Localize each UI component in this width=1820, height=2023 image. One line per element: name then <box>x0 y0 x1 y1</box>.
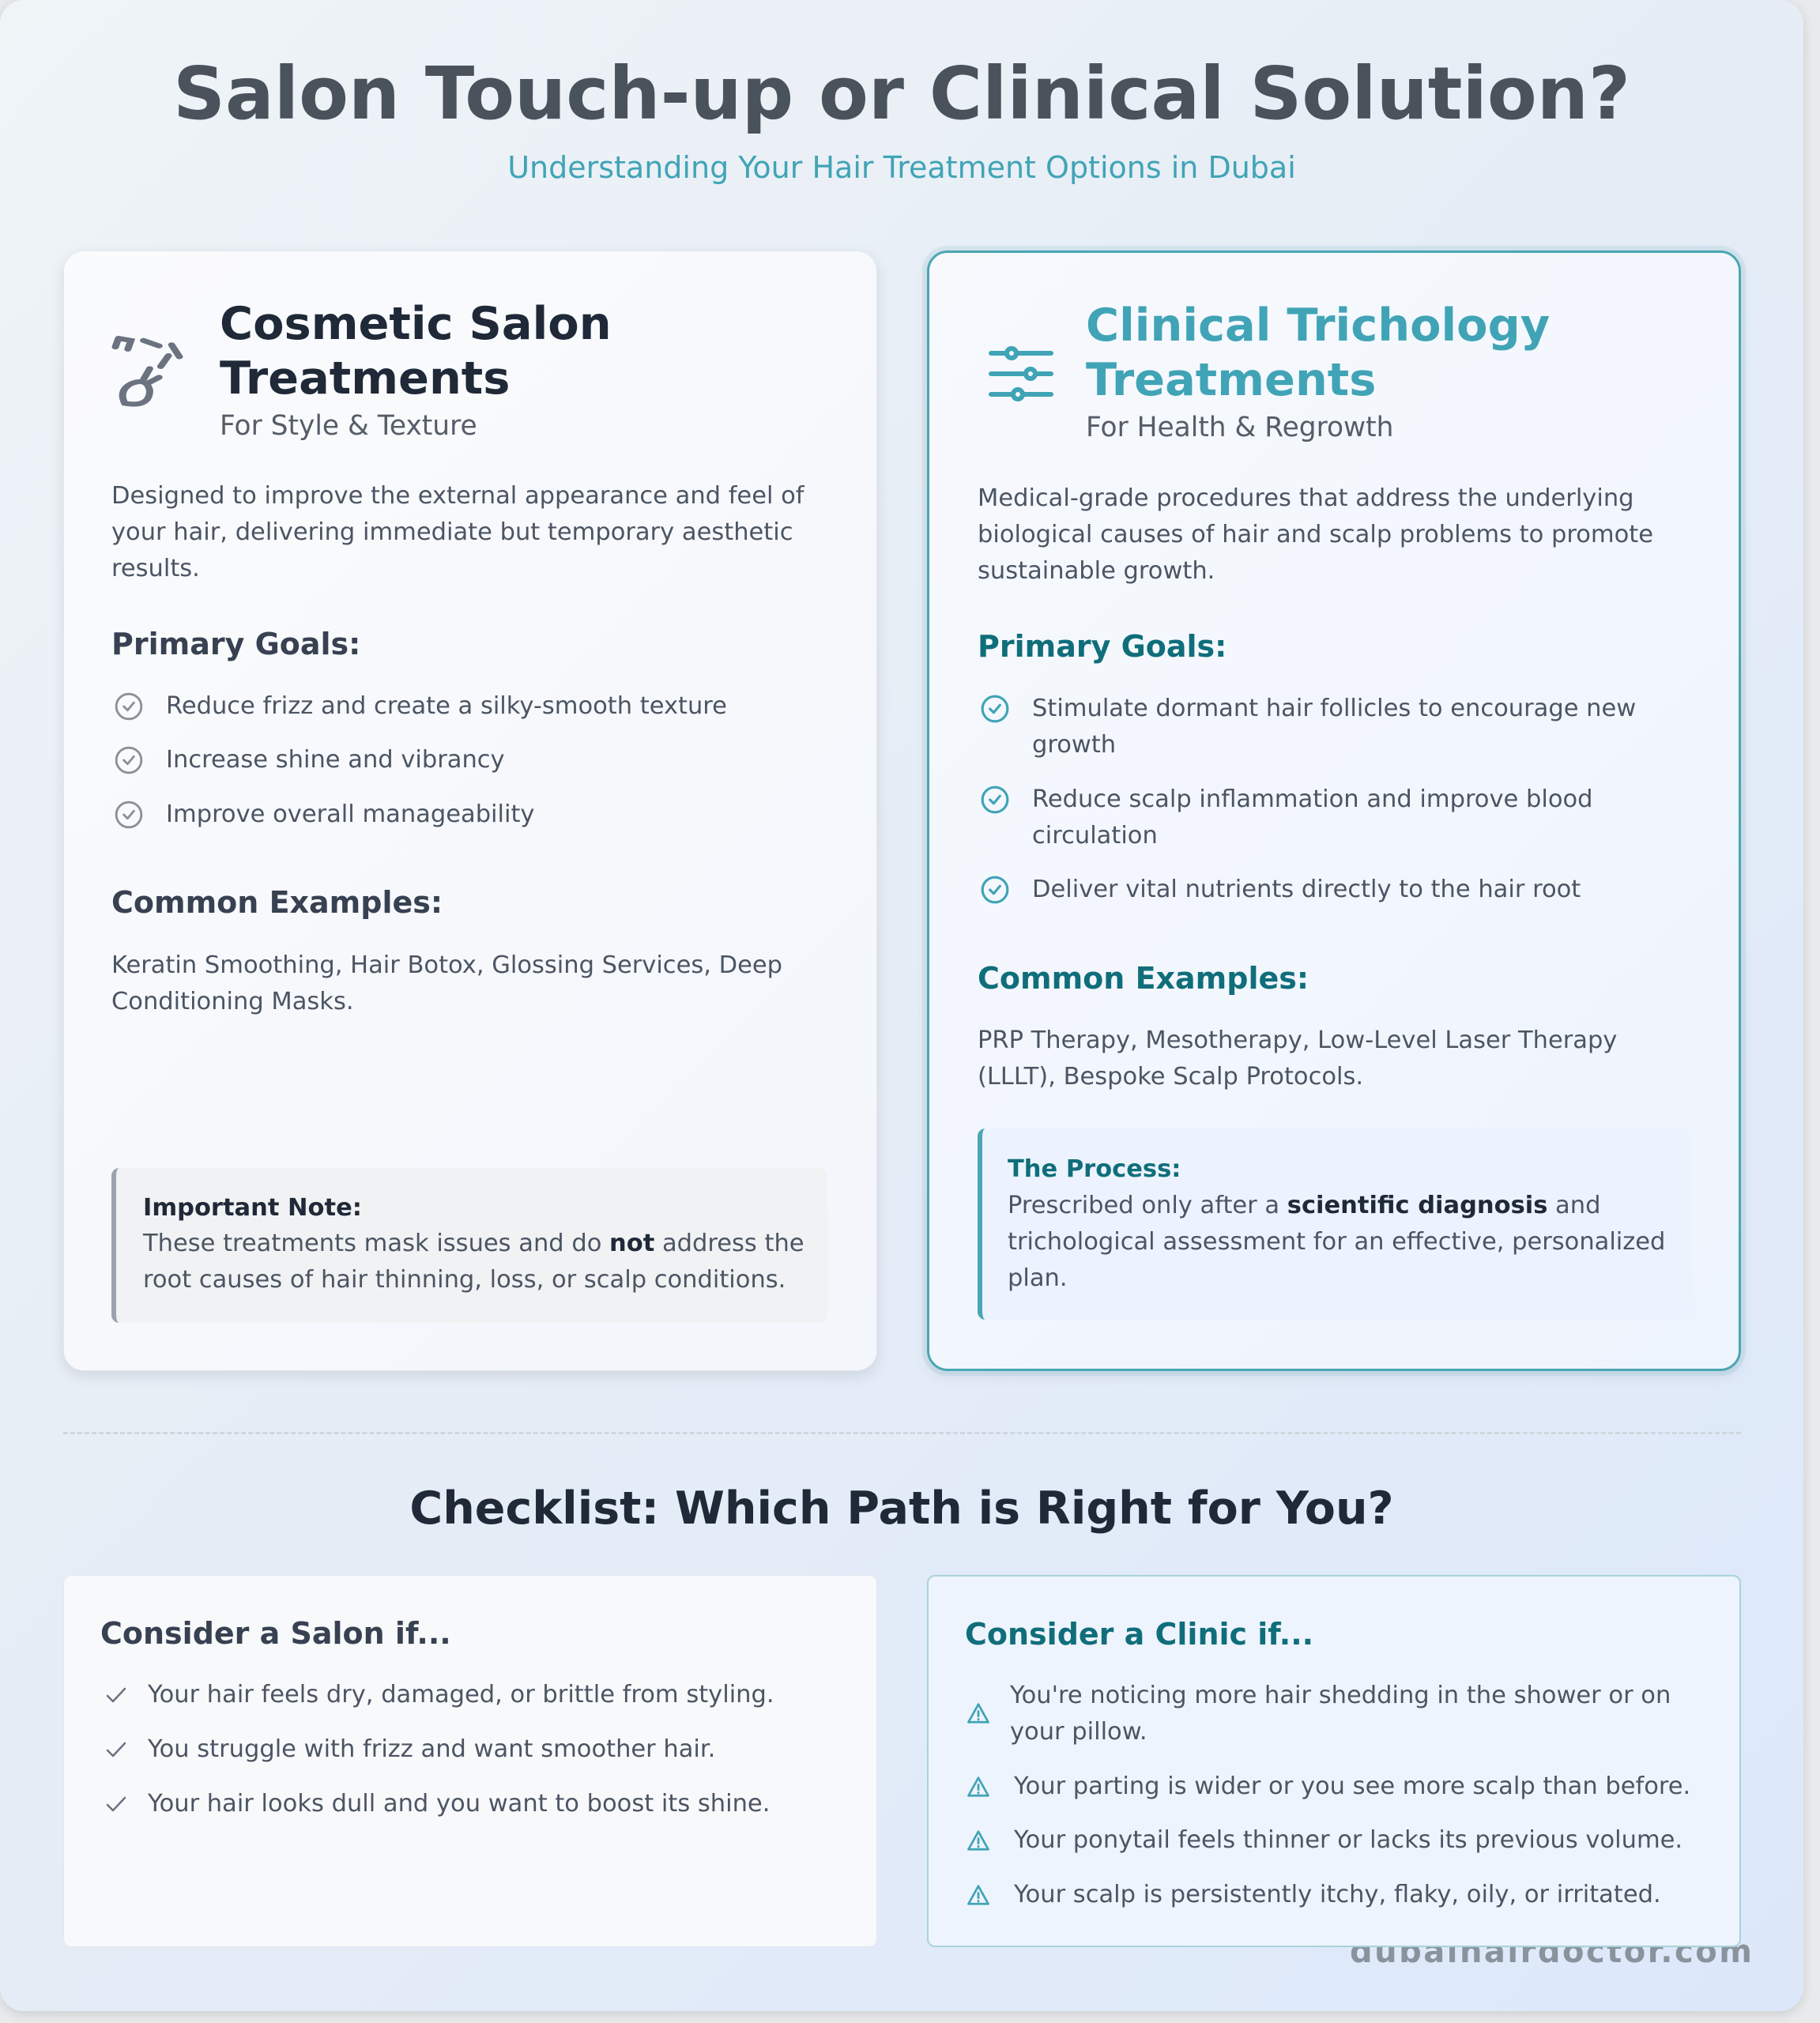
item: Your parting is wider or you see more scalp than before. <box>1014 1772 1690 1800</box>
goals list <box>115 692 727 828</box>
goal item: Reduce scalp inflammation and improve blood <box>1032 785 1593 813</box>
heading: Clinical Trichology <box>1086 299 1550 352</box>
goal item <box>982 695 1636 759</box>
callout: important note: Important Note: <box>143 1194 362 1222</box>
heading: primary goals: Primary Goals: <box>111 627 360 661</box>
description: sustainable growth. <box>978 557 1215 585</box>
item <box>967 1682 1671 1746</box>
examples text: Keratin Smoothing, Hair Botox, Glossing Services, Deep <box>111 951 782 979</box>
item: You struggle with frizz and want smoother hair. <box>148 1735 715 1763</box>
description: Medical-grade procedures that address the underlying <box>978 484 1634 512</box>
callout: the process: Prescribed only after a scientific diagnosis and <box>1008 1192 1600 1219</box>
icon: hair dryer brush <box>112 336 183 407</box>
item: You're noticing more hair shedding in the shower or on <box>1010 1682 1671 1709</box>
examples text: (LLLT), Bespoke Scalp Protocols. <box>978 1063 1363 1091</box>
goal item: Deliver vital nutrients directly to the hair root <box>1032 876 1581 903</box>
item: Your hair feels dry, damaged, or brittle from styling. <box>148 1681 774 1708</box>
icon: sliders <box>989 346 1053 401</box>
goal item: circulation <box>1032 822 1158 850</box>
title: Salon Touch-up or Clinical Solution? <box>173 51 1630 136</box>
panel: cosmetic salon treatments <box>63 251 877 1371</box>
panel: clinical trichology treatments <box>927 251 1741 1371</box>
heading: common examples: Common Examples: <box>978 961 1309 996</box>
examples text: Conditioning Masks. <box>111 988 354 1015</box>
heading: checklist: Checklist: Which Path is Right for You? <box>409 1482 1394 1535</box>
goals list <box>982 695 1636 904</box>
warning items <box>967 1682 1690 1908</box>
heading <box>1086 299 1550 406</box>
goal item: Improve overall manageability <box>166 801 534 828</box>
description: results. <box>111 555 200 582</box>
callout: the process: trichological assessment for an effective, personalized <box>1008 1228 1665 1256</box>
heading: Consider a Clinic if... <box>965 1617 1313 1652</box>
heading: Cosmetic Salon <box>220 297 612 350</box>
heading: Consider a Salon if... <box>100 1616 451 1651</box>
goal item <box>982 785 1593 850</box>
callout: important note: root causes of hair thinning, loss, or scalp conditions. <box>143 1266 786 1294</box>
item: Your scalp is persistently itchy, flaky, oily, or irritated. <box>1014 1881 1661 1908</box>
callout: the process: plan. <box>1008 1264 1068 1292</box>
description: biological causes of hair and scalp problems to promote <box>978 521 1653 548</box>
examples text <box>111 951 782 1015</box>
heading: Treatments <box>1086 353 1376 406</box>
heading: Treatments <box>220 352 510 405</box>
description: your hair, delivering immediate but temporary aesthetic <box>111 518 793 546</box>
item: Your hair looks dull and you want to boost its shine. <box>148 1790 770 1818</box>
panel: consider a clinic <box>927 1575 1741 1947</box>
goal item: Reduce frizz and create a silky-smooth texture <box>166 692 727 720</box>
examples text <box>978 1027 1617 1091</box>
heading: primary goals: Primary Goals: <box>978 629 1227 664</box>
callout: important note: These treatments mask issues and do not address the <box>143 1230 804 1257</box>
examples text: PRP Therapy, Mesotherapy, Low-Level Laser Therapy <box>978 1027 1617 1054</box>
callout: the process <box>978 1128 1691 1320</box>
heading <box>220 297 612 405</box>
callout: the process: The Process: <box>1008 1155 1181 1183</box>
description: Designed to improve the external appearance and feel of <box>111 482 804 510</box>
item: Your ponytail feels thinner or lacks its previous volume. <box>1014 1826 1682 1854</box>
subtitle: Understanding Your Hair Treatment Options in Dubai <box>507 150 1296 185</box>
subheading: For Health & Regrowth <box>1086 412 1393 443</box>
checklist items <box>106 1681 774 1818</box>
watermark: dubaihairdoctor.com <box>1350 1934 1754 1970</box>
goal item: Stimulate dormant hair follicles to encourage new <box>1032 695 1636 722</box>
description <box>111 482 804 582</box>
item: your pillow. <box>1010 1718 1147 1746</box>
heading: common examples: Common Examples: <box>111 885 443 920</box>
panel: consider a salon <box>63 1575 877 1947</box>
description <box>978 484 1653 585</box>
subheading: For Style & Texture <box>220 410 477 442</box>
callout: important note <box>111 1168 827 1323</box>
goal item: growth <box>1032 731 1116 759</box>
goal item: Increase shine and vibrancy <box>166 746 505 774</box>
